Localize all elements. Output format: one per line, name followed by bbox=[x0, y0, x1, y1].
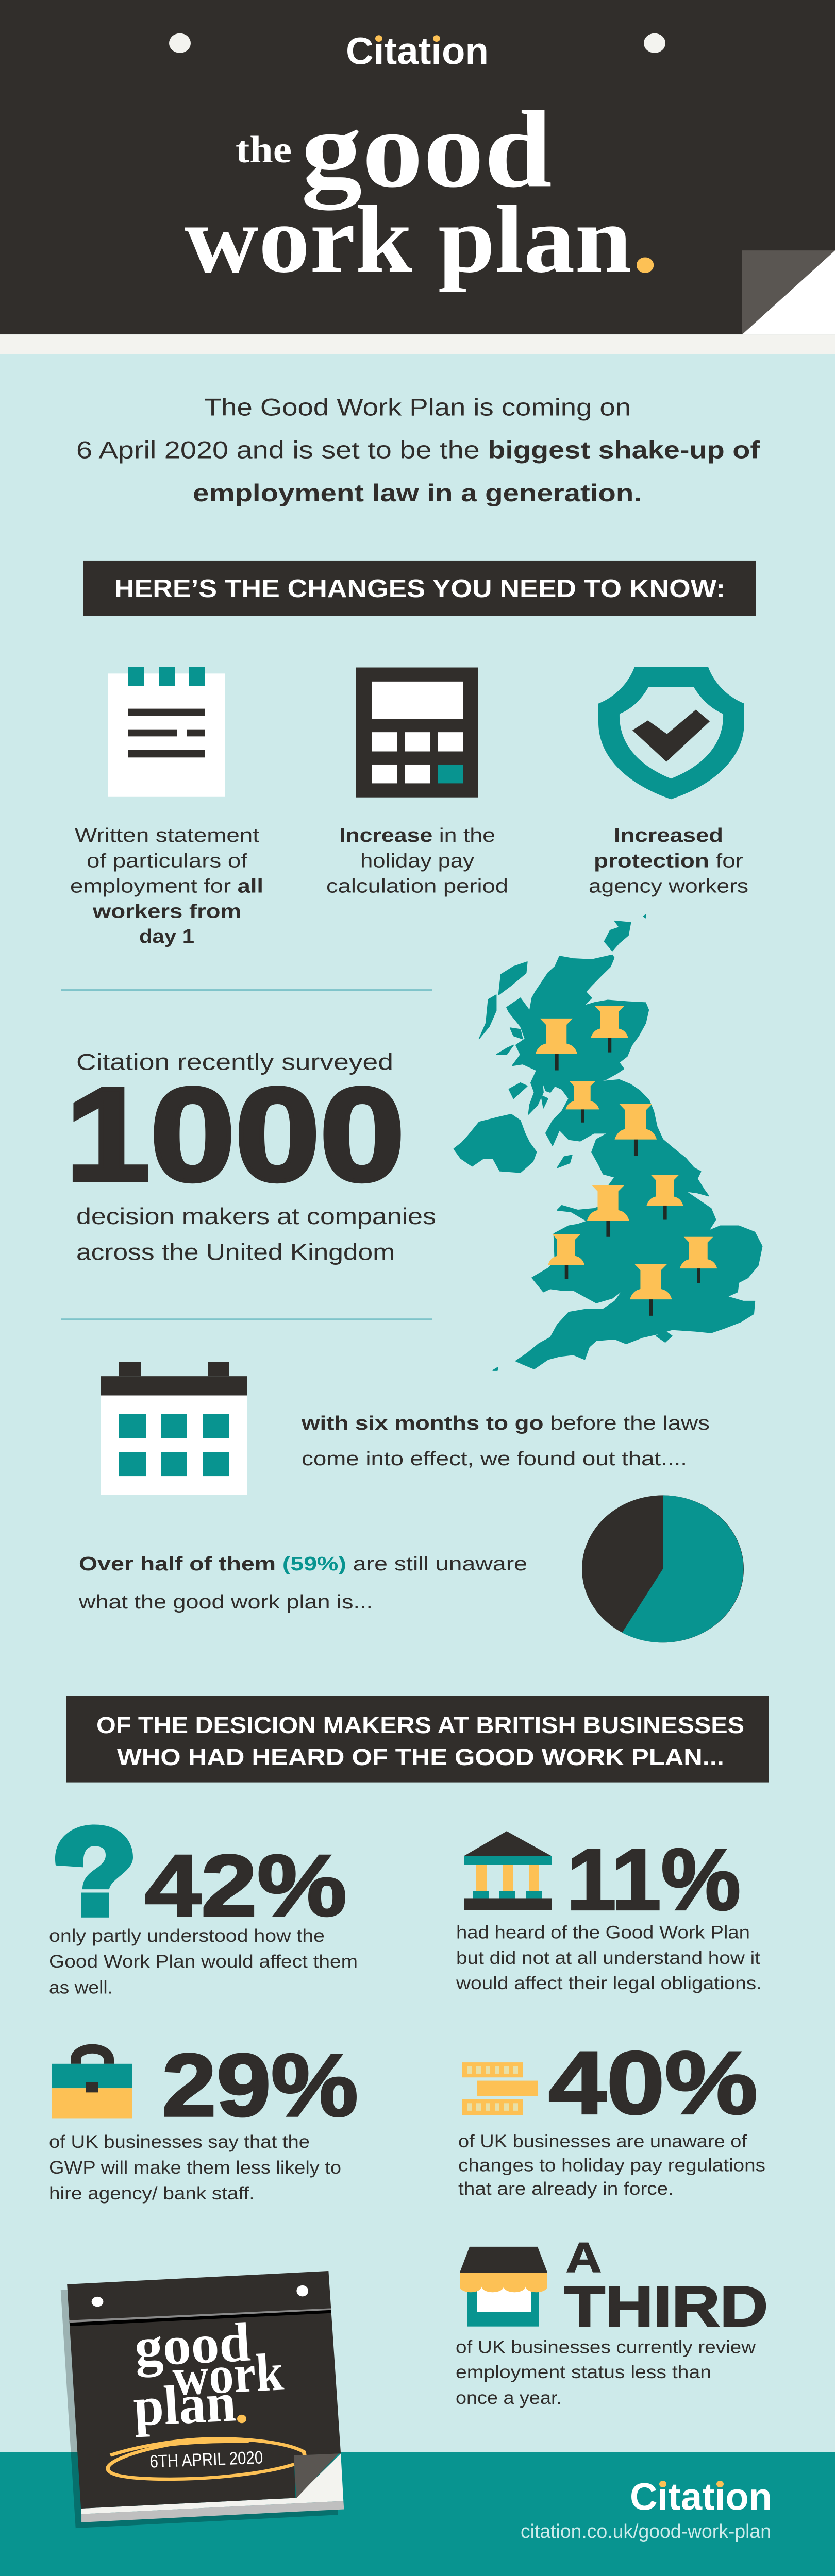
icon: calendar bbox=[101, 1362, 247, 1495]
logo: Citation: Citation bbox=[346, 29, 489, 73]
icon: calendar holes bbox=[169, 33, 665, 53]
title: the bbox=[236, 128, 292, 171]
map shape bbox=[454, 915, 762, 1370]
calendar title: work bbox=[171, 2342, 285, 2406]
caption bbox=[70, 824, 263, 947]
calendar title: good bbox=[133, 2311, 252, 2378]
stat: 29%: of UK businesses say that the bbox=[49, 2131, 310, 2151]
panel: holiday pay bbox=[326, 668, 508, 897]
caption: calculation period bbox=[326, 875, 508, 897]
stat: 40%: that are already in force. bbox=[458, 2178, 674, 2198]
stat: a third bbox=[456, 2234, 768, 2408]
stat: 40% bbox=[458, 2033, 765, 2198]
stat: 42%: 42% bbox=[145, 1837, 347, 1934]
text: over half unaware: Over half of them (59%) are still unaware bbox=[79, 1553, 527, 1575]
stat: a third: A bbox=[566, 2234, 602, 2281]
stat: 11%: had heard of the Good Work Plan bbox=[456, 1922, 750, 1942]
intro text bbox=[76, 394, 760, 507]
icon: briefcase bbox=[52, 2049, 132, 2118]
icon: shield bbox=[598, 667, 744, 799]
intro text: The Good Work Plan is coming on bbox=[204, 394, 631, 421]
banner: decision makers heading: OF THE DESICION MAKERS AT BRITISH BUSINESSES bbox=[96, 1713, 744, 1738]
panel: survey text: Citation recently surveyed bbox=[76, 1049, 393, 1075]
stat: 29% bbox=[49, 2036, 358, 2204]
banner: changes heading: HERE’S THE CHANGES YOU NEED TO KNOW: bbox=[114, 574, 725, 602]
calendar page shapes bbox=[61, 2271, 344, 2528]
stat: 42%: only partly understood how the bbox=[49, 1925, 325, 1946]
intro text: employment law in a generation. bbox=[193, 479, 642, 507]
icon: temple bbox=[464, 1831, 552, 1910]
caption: protection for bbox=[594, 850, 743, 872]
stat: 40%: of UK businesses are unaware of bbox=[458, 2131, 747, 2151]
icon: calculator bbox=[356, 668, 478, 798]
calendar title: plan bbox=[132, 2371, 238, 2438]
caption: Written statement bbox=[75, 824, 259, 846]
pins bbox=[536, 1006, 717, 1316]
stat: 29%: 29% bbox=[162, 2036, 358, 2135]
map: United Kingdom with pins bbox=[454, 915, 762, 1370]
caption: holiday pay bbox=[360, 850, 474, 872]
panel: header bbox=[0, 0, 835, 354]
panel: survey text bbox=[65, 1049, 436, 1265]
title: good bbox=[301, 88, 552, 211]
caption: day 1 bbox=[139, 925, 194, 947]
icon: notepad bbox=[108, 667, 225, 797]
stat: 42%: Good Work Plan would affect them bbox=[49, 1951, 358, 1972]
title: work plan bbox=[185, 186, 632, 293]
stat: 11%: would affect their legal obligations. bbox=[456, 1973, 762, 1993]
stat: 11%: 11% bbox=[566, 1831, 741, 1928]
page fold bbox=[742, 250, 835, 334]
divider line top bbox=[61, 989, 432, 991]
circled date: 6TH APRIL 2020 bbox=[149, 2447, 263, 2471]
caption: workers from bbox=[92, 900, 241, 922]
text: six months to go: with six months to go before the laws bbox=[301, 1412, 710, 1434]
panel: survey text: across the United Kingdom bbox=[76, 1239, 395, 1265]
stat: 42%: as well. bbox=[49, 1977, 113, 1997]
stat: a third: once a year. bbox=[456, 2387, 562, 2408]
text: six months to go: come into effect, we found out that.... bbox=[302, 1448, 687, 1470]
stat: 11% bbox=[456, 1831, 762, 1993]
title: . bbox=[632, 186, 658, 293]
calendar page fold bbox=[294, 2453, 339, 2498]
text: over half unaware bbox=[78, 1553, 527, 1613]
caption bbox=[326, 824, 508, 897]
text: six months to go bbox=[301, 1412, 710, 1470]
stat: 11%: but did not at all understand how it bbox=[456, 1947, 761, 1968]
stat: a third: employment status less than bbox=[456, 2361, 711, 2382]
footer logo and URL: citation.co.uk/good-work-plan bbox=[521, 2520, 771, 2543]
footer logo and URL bbox=[521, 2475, 772, 2543]
stat: 42% bbox=[49, 1825, 358, 1997]
icon: shop bbox=[460, 2247, 547, 2327]
panel: written statement bbox=[70, 667, 263, 947]
pie chart: 59% bbox=[582, 1495, 744, 1642]
caption: employment for all bbox=[70, 875, 263, 897]
circled date bbox=[108, 2438, 305, 2479]
stat: 29%: GWP will make them less likely to bbox=[49, 2157, 341, 2177]
banner: changes heading bbox=[83, 561, 756, 616]
icon: question mark bbox=[55, 1825, 133, 1918]
stat: a third: of UK businesses currently review bbox=[456, 2336, 756, 2357]
caption: Increase in the bbox=[339, 824, 495, 846]
calendar title bbox=[132, 2311, 285, 2438]
stat: a third: THIRD bbox=[564, 2274, 768, 2338]
icon: stacked cash bbox=[462, 2062, 538, 2115]
panel: agency workers bbox=[589, 667, 748, 897]
caption: of particulars of bbox=[87, 850, 248, 872]
intro text: 6 April 2020 and is set to be the biggest shake-up of bbox=[76, 436, 760, 464]
text: over half unaware: what the good work plan is... bbox=[78, 1591, 373, 1613]
illustration: tear-off calendar bbox=[61, 2271, 344, 2528]
footer band bbox=[0, 2452, 835, 2576]
stat: 29%: hire agency/ bank staff. bbox=[49, 2183, 255, 2204]
banner: decision makers heading bbox=[66, 1696, 769, 1783]
footer logo and URL: Citation bbox=[630, 2475, 772, 2518]
stat: 40%: 40% bbox=[548, 2033, 758, 2132]
caption: Increased bbox=[614, 824, 723, 846]
stat: 40%: changes to holiday pay regulations bbox=[458, 2155, 765, 2175]
title bbox=[185, 88, 658, 293]
caption bbox=[589, 824, 748, 897]
banner: decision makers heading: WHO HAD HEARD OF THE GOOD WORK PLAN... bbox=[117, 1744, 724, 1770]
divider line bottom bbox=[61, 1318, 432, 1320]
number: 1000: 1000 bbox=[65, 1061, 405, 1209]
caption: agency workers bbox=[589, 875, 748, 897]
panel: survey text: decision makers at companies bbox=[76, 1204, 436, 1229]
